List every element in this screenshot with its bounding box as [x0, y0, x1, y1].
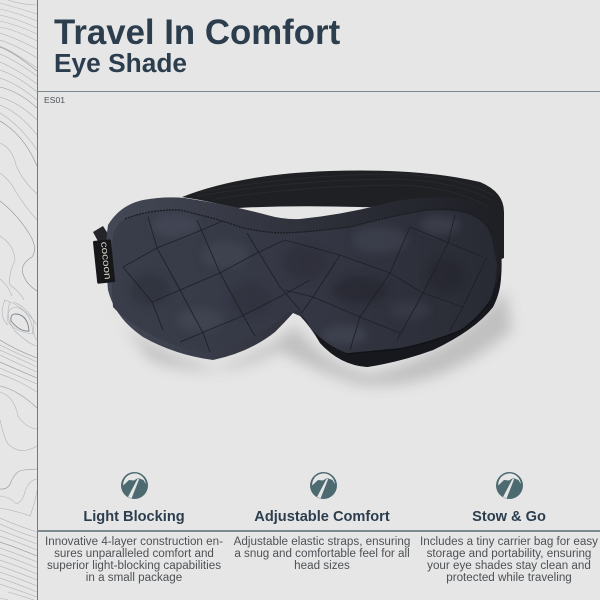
- description: [420, 534, 598, 584]
- description: protected while traveling: [446, 570, 572, 584]
- heading: Adjustable Comfort: [254, 509, 390, 525]
- feature: stow and go: [420, 472, 598, 584]
- description: a snug and comfortable feel for all: [234, 546, 410, 560]
- description: head sizes: [294, 558, 350, 572]
- description: Includes a tiny carrier bag for easy: [420, 534, 598, 548]
- description: in a small package: [86, 570, 182, 584]
- description: Adjustable elastic straps, ensuring: [234, 534, 410, 548]
- heading: Stow & Go: [472, 509, 546, 525]
- topographic pattern panel: [0, 0, 37, 600]
- description: storage and portability, ensuring: [427, 546, 591, 560]
- stitching: [125, 210, 491, 235]
- mask body: [100, 195, 502, 367]
- bottom divider: [37, 530, 600, 532]
- brand label: [93, 239, 115, 284]
- product image: eye shade: [93, 170, 516, 391]
- shadow: [105, 290, 512, 386]
- feature: light blocking: [45, 472, 223, 584]
- description: Innovative 4-layer construction en-: [45, 534, 223, 548]
- description: [45, 534, 223, 584]
- icon: mountain: [121, 472, 148, 499]
- icon: mountain: [310, 472, 337, 499]
- product code: ES01: [44, 95, 65, 105]
- description: sures unparalleled comfort and: [54, 546, 214, 560]
- heading: Light Blocking: [83, 509, 185, 525]
- vertical divider: [37, 0, 38, 600]
- icon: mountain: [496, 472, 523, 499]
- elastic strap: [93, 170, 504, 262]
- description: [234, 534, 410, 572]
- top divider: [37, 90, 600, 92]
- title: Travel In Comfort: [54, 13, 340, 52]
- description: superior light-blocking capabilities: [47, 558, 221, 572]
- subtitle: Eye Shade: [54, 48, 187, 78]
- feature: adjustable comfort: [234, 472, 410, 572]
- description: your eye shades stay clean and: [427, 558, 591, 572]
- quilted panels: [112, 210, 497, 353]
- brand label: cocoon: [98, 241, 113, 280]
